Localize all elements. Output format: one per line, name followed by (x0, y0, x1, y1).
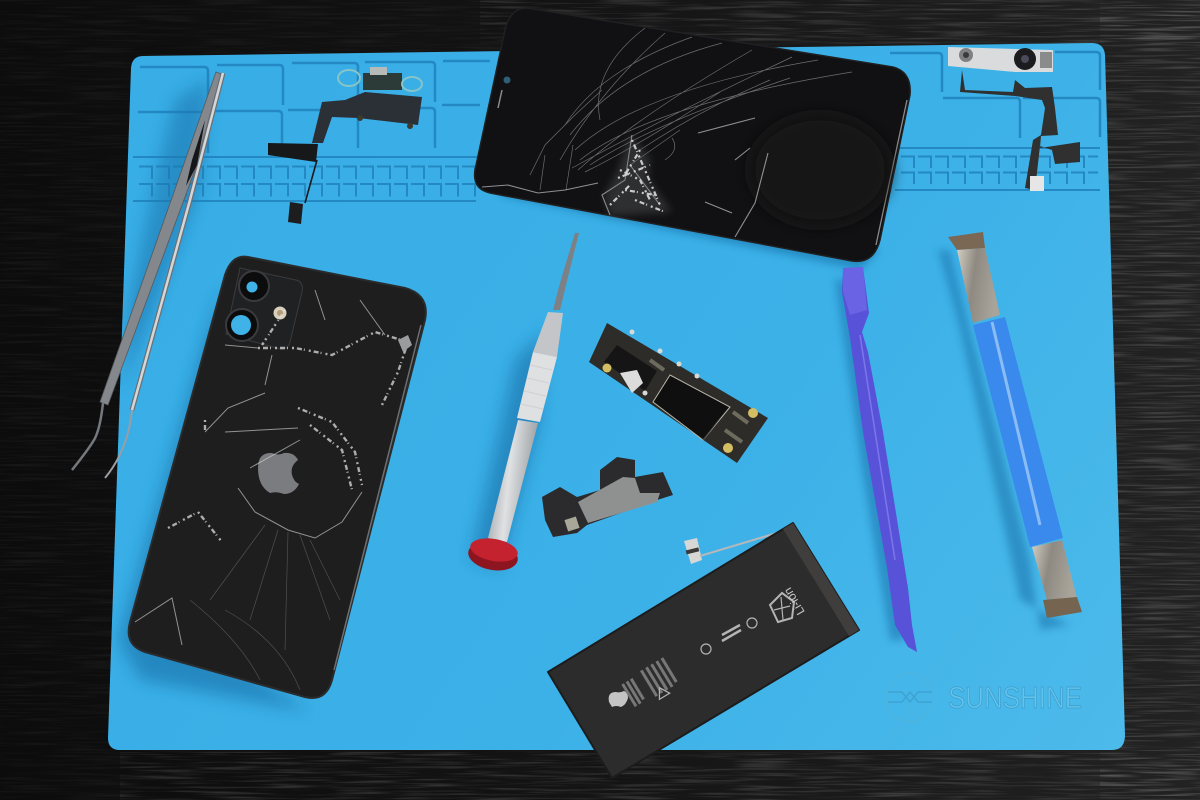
brush: bottom bristles (1043, 597, 1082, 618)
mat: brand logo and wordmark: SUNSHINE (948, 680, 1082, 715)
silicone repair mat (108, 43, 1125, 750)
chipped glass (398, 335, 412, 352)
battery apple mark (609, 691, 628, 707)
tweezers (72, 72, 223, 478)
purple spudger (835, 267, 917, 652)
mat: brand logo and wordmark (886, 673, 1082, 721)
cracked phone: front screen (475, 8, 910, 270)
screwdriver (466, 233, 579, 574)
crack impact cluster (604, 135, 672, 216)
screen cracks (482, 28, 852, 237)
cracked phone: rear glass (118, 257, 426, 712)
flex cable left (268, 67, 422, 224)
battery (548, 523, 859, 778)
flex cable right with cameras (948, 47, 1080, 191)
apple logo mark (258, 453, 299, 494)
battery certification marks (654, 593, 794, 699)
mat: small screw grid right (895, 155, 1100, 190)
rear glass cracks (135, 290, 408, 690)
battery pull tab (684, 532, 780, 564)
screwdriver red base (466, 535, 520, 574)
brush: top bristles (948, 232, 985, 250)
logic board (589, 323, 768, 463)
rear camera island (226, 268, 302, 349)
mat: upper compartment tray (133, 52, 1100, 157)
mat: small screw grid left (133, 165, 478, 201)
blue cleaning brush (938, 232, 1082, 630)
battery print (620, 657, 679, 709)
battery: Li-ion (781, 585, 808, 618)
speaker module (542, 457, 673, 537)
